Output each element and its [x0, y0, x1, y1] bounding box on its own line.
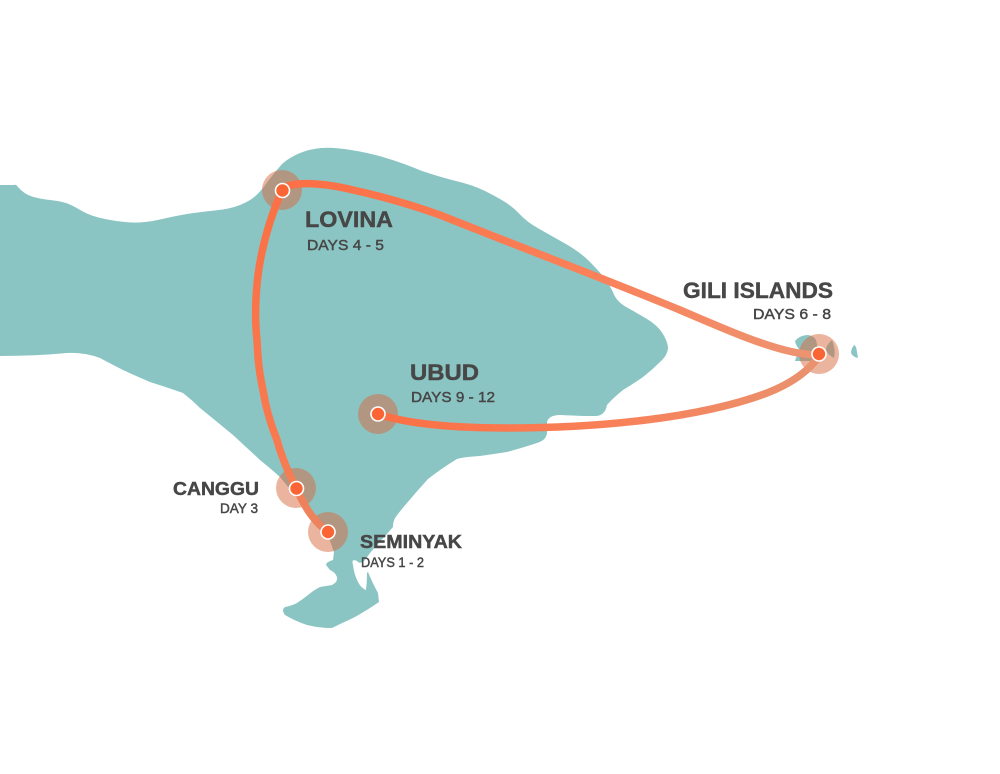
marker: Gili Islands — [812, 347, 826, 361]
label: Lovina: LOVINA — [305, 207, 393, 232]
marker: Canggu — [290, 482, 304, 496]
label: Seminyak: SEMINYAK — [360, 531, 463, 552]
location halo: Ubud — [358, 394, 398, 434]
location halo: Gili Islands — [799, 334, 839, 374]
label: Gili Islands — [683, 278, 833, 323]
location halo: Lovina — [262, 170, 302, 210]
label: Seminyak: DAYS 1 - 2 — [361, 555, 424, 570]
location halo: Canggu — [276, 468, 316, 508]
label: Ubud — [410, 360, 495, 406]
label: Lovina: DAYS 4 - 5 — [307, 238, 384, 254]
map: Gili Trawangan island — [795, 335, 820, 361]
label: Ubud: UBUD — [410, 360, 479, 385]
map: Gili Meno island — [826, 340, 835, 358]
label: Canggu: DAY 3 — [220, 501, 258, 516]
map: Bali island — [0, 148, 668, 628]
location halo: Seminyak — [308, 512, 348, 552]
marker: Ubud — [371, 407, 385, 421]
marker: Lovina — [276, 184, 290, 198]
label: Seminyak — [360, 531, 463, 570]
marker: Seminyak — [321, 525, 335, 539]
label: Canggu — [173, 478, 259, 516]
label: Gili Islands: GILI ISLANDS — [683, 278, 833, 303]
route: Lovina to Canggu and Seminyak — [256, 190, 328, 532]
label: Lovina — [305, 207, 393, 254]
route: Ubud to Gili Islands — [378, 356, 819, 428]
label: Ubud: DAYS 9 - 12 — [411, 390, 495, 406]
label: Canggu: CANGGU — [173, 478, 259, 499]
route: Lovina to Gili Islands — [282, 184, 819, 355]
label: Gili Islands: DAYS 6 - 8 — [753, 307, 831, 323]
map: Gili Air island — [851, 345, 858, 358]
